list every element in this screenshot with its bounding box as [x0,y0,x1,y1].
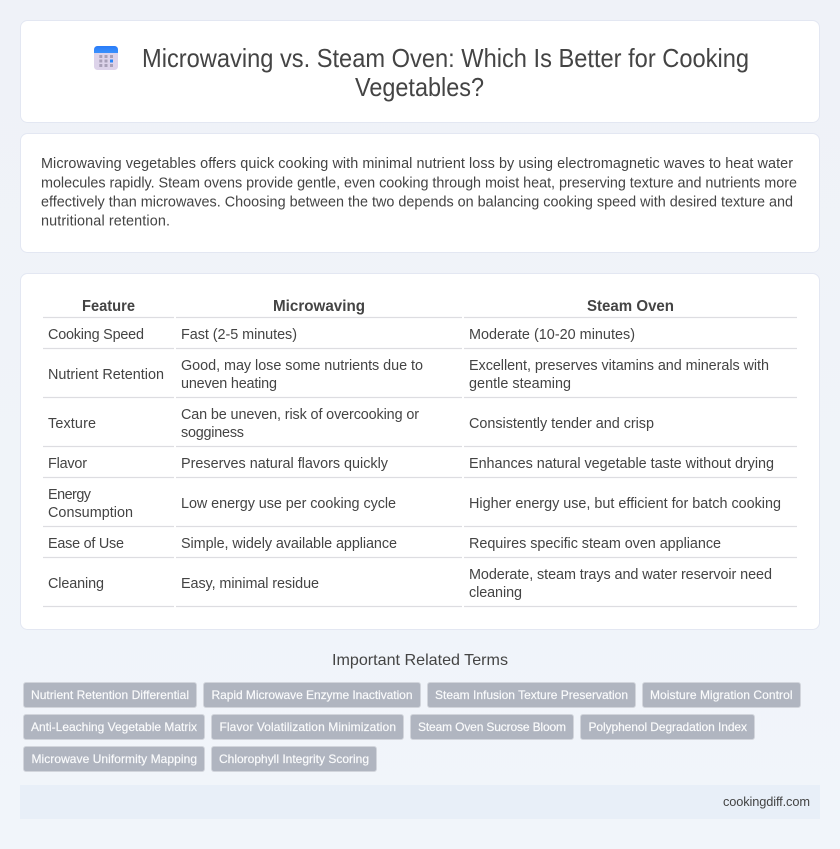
tag [212,714,404,740]
tag [410,714,574,740]
row: texture: Consistently tender and crisp [469,416,654,432]
tag: Steam Infusion Texture Preservation [435,688,628,702]
row: cleaning: Cleaning [48,576,104,592]
row: nutrient retention: gentle steaming [469,376,571,392]
row: energy consumption: Consumption [48,505,133,521]
tag: Chlorophyll Integrity Scoring [219,752,369,766]
table header row: Steam Oven [587,298,674,315]
panel: introduction [20,134,820,252]
tag: Flavor Volatilization Minimization [220,720,396,734]
row: ease of use: Simple, widely available appliance [181,536,397,552]
row: ease of use: Requires specific steam oven appliance [469,536,721,552]
title: Vegetables? [355,74,484,102]
table header row [82,298,674,315]
tag: Moisture Migration Control [650,688,792,702]
tag: Steam Oven Sucrose Bloom [418,720,566,734]
table header row: Microwaving [273,298,365,315]
row: flavor [48,456,774,472]
text block: introduction: molecules rapidly. Steam ovens provide gentle, even cooking through moist heat, preserving texture and nutrients more [41,175,797,191]
tag [204,682,420,708]
tag [24,682,196,708]
text block: introduction: nutritional retention. [41,214,170,230]
tag [428,682,636,708]
row: flavor: Enhances natural vegetable taste without drying [469,456,774,472]
row: texture: sogginess [181,425,244,441]
tag: Microwave Uniformity Mapping [32,752,197,766]
panel: comparison table [20,274,820,630]
row: cleaning: cleaning [469,585,522,601]
tag [212,746,376,772]
row: nutrient retention: Good, may lose some nutrients due to [181,358,423,374]
row: cooking speed: Cooking Speed [48,327,144,343]
tag [580,714,754,740]
row: texture [48,407,654,441]
text block: introduction: effectively than microwaves. Choosing between the two depends on balancing cooking speed with desired texture and [41,194,793,210]
row: cleaning: Moderate, steam trays and water reservoir need [469,567,772,583]
footer [20,785,820,819]
tag: Rapid Microwave Enzyme Inactivation [212,688,412,702]
row: cleaning [48,567,772,601]
tag [24,746,204,772]
row: flavor: Preserves natural flavors quickly [181,456,389,472]
row: nutrient retention: Nutrient Retention [48,367,164,383]
heading: important related terms: Important Related Terms [332,652,508,669]
tag: Nutrient Retention Differential [31,688,189,702]
title: Microwaving vs. Steam Oven: Which Is Better for Cooking [142,45,749,73]
tag list [24,682,800,772]
row: cleaning: Easy, minimal residue [181,576,319,592]
row: energy consumption: Low energy use per cooking cycle [181,496,396,512]
row: cooking speed [48,327,635,343]
row: energy consumption: Energy [48,487,92,503]
footer: cookingdiff.com [723,794,810,809]
icon: calendar [94,46,118,70]
row: nutrient retention [48,358,769,392]
tag [642,682,800,708]
row: energy consumption: Higher energy use, but efficient for batch cooking [469,496,781,512]
tag: Polyphenol Degradation Index [588,720,747,734]
tag [24,714,204,740]
row: ease of use: Ease of Use [48,536,124,552]
row: nutrient retention: Excellent, preserves vitamins and minerals with [469,358,769,374]
row: flavor: Flavor [48,456,87,472]
panel: title header [20,20,820,122]
row: nutrient retention: uneven heating [181,376,277,392]
text block: introduction: Microwaving vegetables offers quick cooking with minimal nutrient loss by using electromagnetic waves to heat water [41,156,793,172]
row: ease of use [48,536,721,552]
table header row: Feature [82,298,135,315]
row: cooking speed: Fast (2-5 minutes) [181,327,297,343]
tag: Anti-Leaching Vegetable Matrix [31,720,197,734]
row: energy consumption [48,487,781,521]
row: cooking speed: Moderate (10-20 minutes) [469,327,635,343]
row: texture: Can be uneven, risk of overcooking or [181,407,419,423]
row: texture: Texture [48,416,96,432]
